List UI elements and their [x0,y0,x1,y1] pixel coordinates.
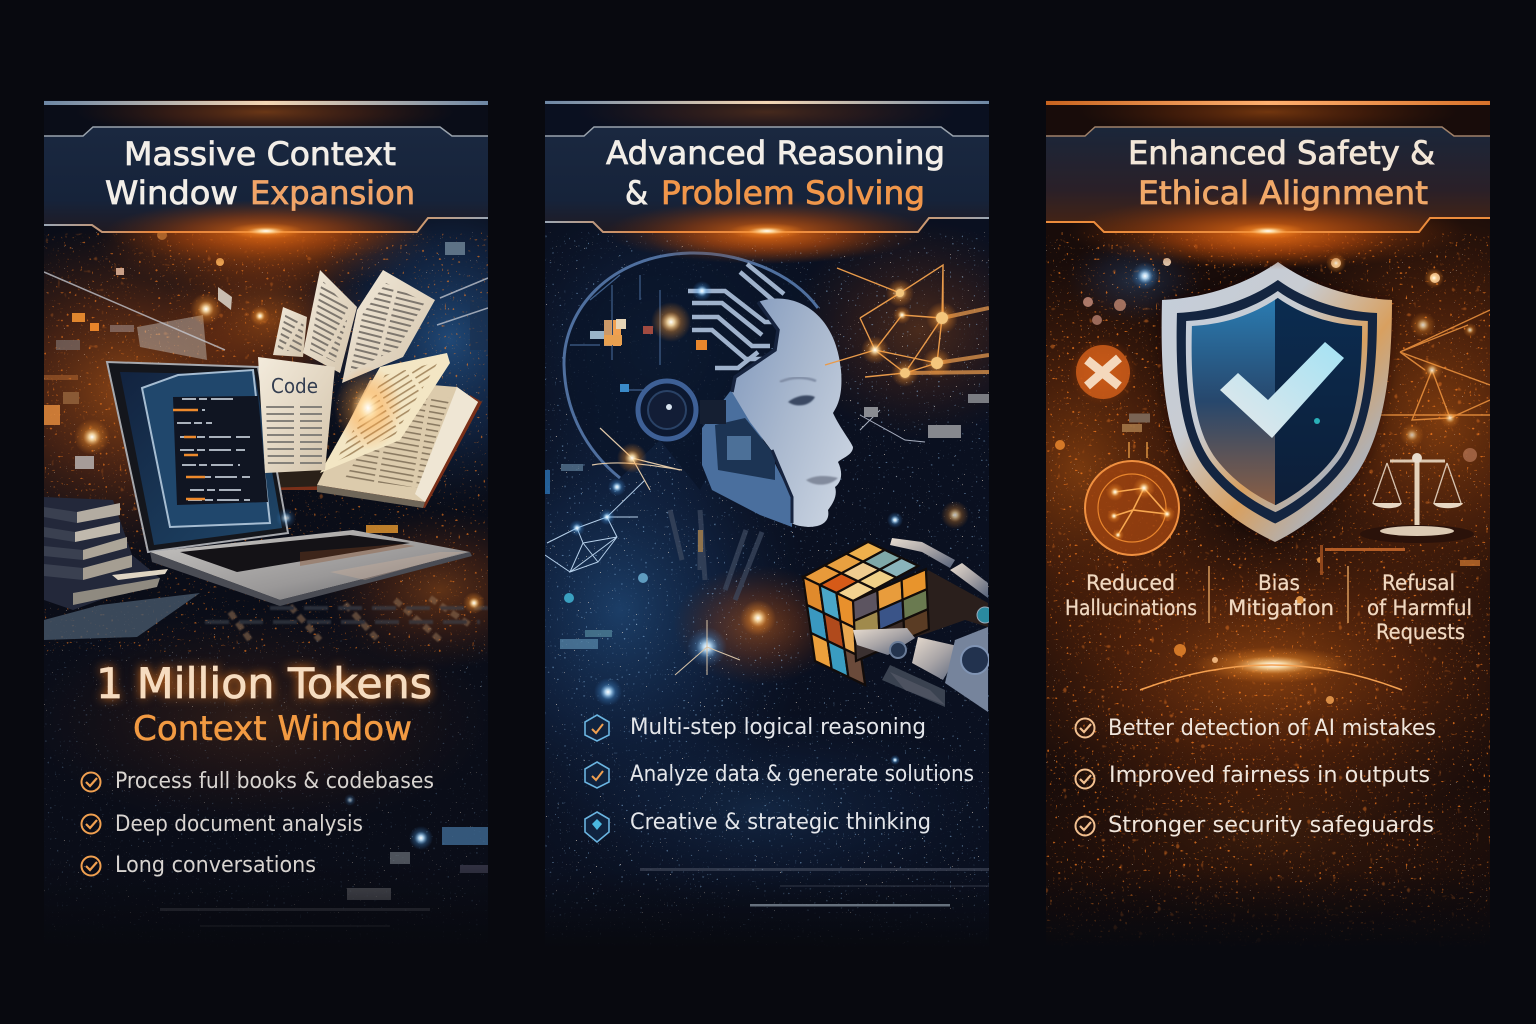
jaw machinery [702,385,792,527]
icon: robot hand back [882,538,988,707]
icon: open book [262,353,482,508]
stat: 1 million tokens: Context Window [133,709,412,749]
check mark [1220,342,1344,438]
title [606,134,945,212]
bottom light lines [640,868,989,906]
header: panel one [44,101,488,264]
item: creative thinking [585,810,931,842]
title: Massive Context [124,135,396,173]
ear speaker [638,381,696,439]
eye [788,395,815,405]
item: fairness: Improved fairness in outputs [1109,763,1430,788]
icon: neural globe [1085,461,1179,555]
icon: code document [258,357,335,473]
icon: floating paper pages [273,270,435,383]
icon: stack of books [44,497,200,640]
head dome [564,253,818,490]
title [105,135,415,212]
label: bias mitigation: Mitigation [1228,596,1334,620]
code label: Code [271,374,318,398]
stat: 1 million tokens [96,659,432,749]
floating data squares [44,242,488,533]
item: document analysis: Deep document analysis [115,812,363,837]
list: safety features [1076,716,1436,838]
lower data fragments [160,827,488,927]
icon: ai head [564,253,853,600]
glints [594,501,969,765]
label: bias mitigation [1228,571,1334,620]
network: orange constellation [825,265,989,442]
glints [74,230,485,850]
label: reduced hallucinations [1066,573,1196,616]
title: Enhanced Safety & [1128,134,1435,172]
item: detection: Better detection of AI mistakes [1108,716,1436,741]
icon: shield with check [1162,262,1392,542]
label: refusal of harmful requests: Requests [1376,620,1465,644]
list: reasoning features [585,715,974,842]
label: refusal of harmful requests: Refusal [1382,571,1455,595]
header: panel two [545,101,989,264]
title: Window [105,174,238,212]
feature labels [1065,571,1472,644]
title [1128,134,1435,212]
item: long conversations: Long conversations [115,853,316,878]
panel: massive context window expansion [44,100,488,939]
item: logical reasoning: Multi-step logical reasoning [630,715,926,740]
network: orange constellation [1131,253,1490,447]
face mask [732,299,853,527]
label: reduced hallucinations: Reduced [1086,571,1175,595]
icon: laptop [107,362,472,606]
network: blue constellation [545,428,682,649]
desk streak lights [205,598,488,640]
stat: 1 million tokens: 1 Million Tokens [96,659,432,708]
title: Expansion [250,174,415,212]
label: bias mitigation: Bias [1258,571,1300,595]
icon: balance scales [1360,453,1474,543]
panel: enhanced safety and ethical alignment [1046,100,1490,944]
icon: robot hand front [853,607,993,712]
bokeh particles [1055,258,1480,704]
neck cables [670,510,762,600]
label: refusal of harmful requests: of Harmful [1367,596,1472,620]
item: creative thinking: Creative & strategic thinking [630,810,931,835]
circuit patterns [688,264,784,368]
header: panel three [1046,101,1490,270]
code overlay window [142,370,270,527]
title: & [625,174,648,212]
title: Advanced Reasoning [606,134,945,172]
item: security: Stronger security safeguards [1108,813,1434,838]
panel: advanced reasoning and problem solving [545,100,989,943]
icon: x mark badge [1069,338,1150,458]
item: process books: Process full books & codebases [115,769,434,794]
item: analyze data: Analyze data & generate solutions [630,762,974,787]
mouth [806,476,838,485]
label: refusal of harmful requests [1367,571,1472,644]
icon: rubiks cube [803,542,929,685]
title: Ethical Alignment [1138,174,1428,212]
glowing arc [1140,647,1402,690]
label: reduced hallucinations: Hallucinations [1065,596,1197,620]
title: Problem Solving [661,174,925,212]
list: context window features [82,769,434,878]
